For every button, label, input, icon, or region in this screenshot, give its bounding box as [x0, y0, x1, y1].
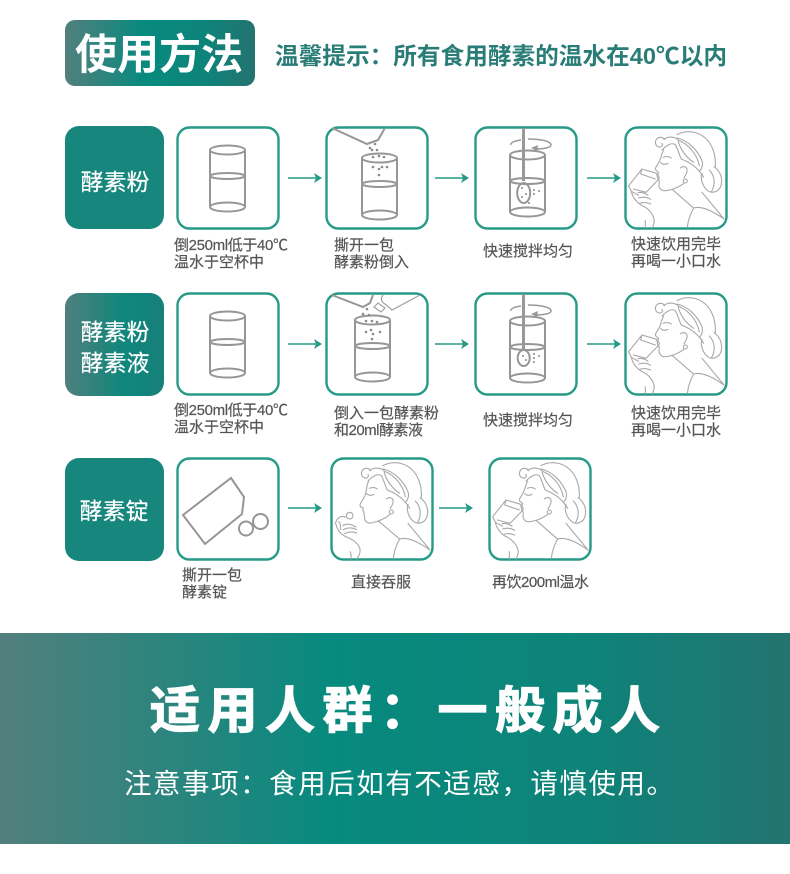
bottom banner	[0, 633, 790, 844]
step 4: drink: 再喝一小口水	[631, 422, 721, 439]
arrow	[288, 339, 322, 349]
step 4: drink	[626, 294, 726, 439]
step 4: drink: 快速饮用完毕	[631, 236, 721, 253]
arrow	[439, 503, 473, 513]
arrow	[288, 173, 322, 183]
step 2: add powder and liquid	[326, 294, 439, 439]
label tile: 酵素粉	[65, 126, 164, 229]
caution note: 注意事项：食用后如有不适感，请慎使用。	[124, 768, 674, 799]
title badge: 使用方法	[65, 20, 255, 86]
step 1: tear packet: 酵素锭	[182, 584, 227, 601]
title badge: 使用方法: 使用方法	[75, 31, 243, 78]
step 3: stir: 快速搅拌均匀	[483, 412, 573, 429]
step 3: drink warm water: 再饮200ml温水	[492, 574, 589, 591]
step 4: drink	[626, 128, 726, 270]
label tile: 酵素锭	[65, 458, 164, 561]
step 1: pour water: 倒250ml低于40℃	[174, 237, 288, 254]
arrow	[587, 339, 621, 349]
step 2: swallow: 直接吞服	[351, 574, 411, 591]
label tile: 酵素粉: 酵素粉	[80, 169, 150, 195]
step 2: swallow	[332, 458, 432, 591]
arrow	[587, 173, 621, 183]
step 4: drink: 快速饮用完毕	[631, 405, 721, 422]
step 3: stir	[476, 128, 576, 260]
row 2: 酵素粉 + 酵素液	[65, 293, 726, 439]
step 2: add powder and liquid: 和20ml酵素液	[334, 422, 423, 439]
arrow	[435, 339, 469, 349]
step 1: pour water: 倒250ml低于40℃	[174, 402, 288, 419]
row 1: 酵素粉	[65, 126, 726, 271]
step 2: add powder and liquid: 倒入一包酵素粉	[334, 405, 439, 422]
step 2: add powder	[326, 128, 428, 271]
arrow	[288, 503, 322, 513]
audience heading: 适用人群：一般成人	[150, 683, 660, 739]
row 3: 酵素锭	[65, 458, 590, 601]
step 1: pour water	[174, 294, 288, 436]
step 3: stir: 快速搅拌均匀	[483, 243, 573, 260]
step 1: tear packet: 撕开一包	[182, 567, 242, 584]
temperature tip: 温馨提示：所有食用酵素的温水在40℃以内	[275, 42, 727, 69]
arrow	[435, 173, 469, 183]
step 4: drink: 再喝一小口水	[631, 253, 721, 270]
label tile: 酵素粉 酵素液: 酵素粉	[80, 319, 150, 345]
label tile: 酵素锭: 酵素锭	[80, 498, 148, 524]
step 1: pour water: 温水于空杯中	[174, 419, 264, 436]
step 2: add powder: 酵素粉倒入	[334, 254, 409, 271]
label tile: 酵素粉 酵素液	[65, 293, 164, 396]
label tile: 酵素粉 酵素液: 酵素液	[80, 350, 150, 376]
step 3: stir	[476, 294, 576, 429]
step 1: pour water	[174, 128, 288, 271]
step 3: drink warm water	[490, 458, 590, 591]
step 2: add powder: 撕开一包	[334, 237, 394, 254]
step 1: pour water: 温水于空杯中	[174, 254, 264, 271]
step 1: tear packet	[178, 458, 278, 601]
